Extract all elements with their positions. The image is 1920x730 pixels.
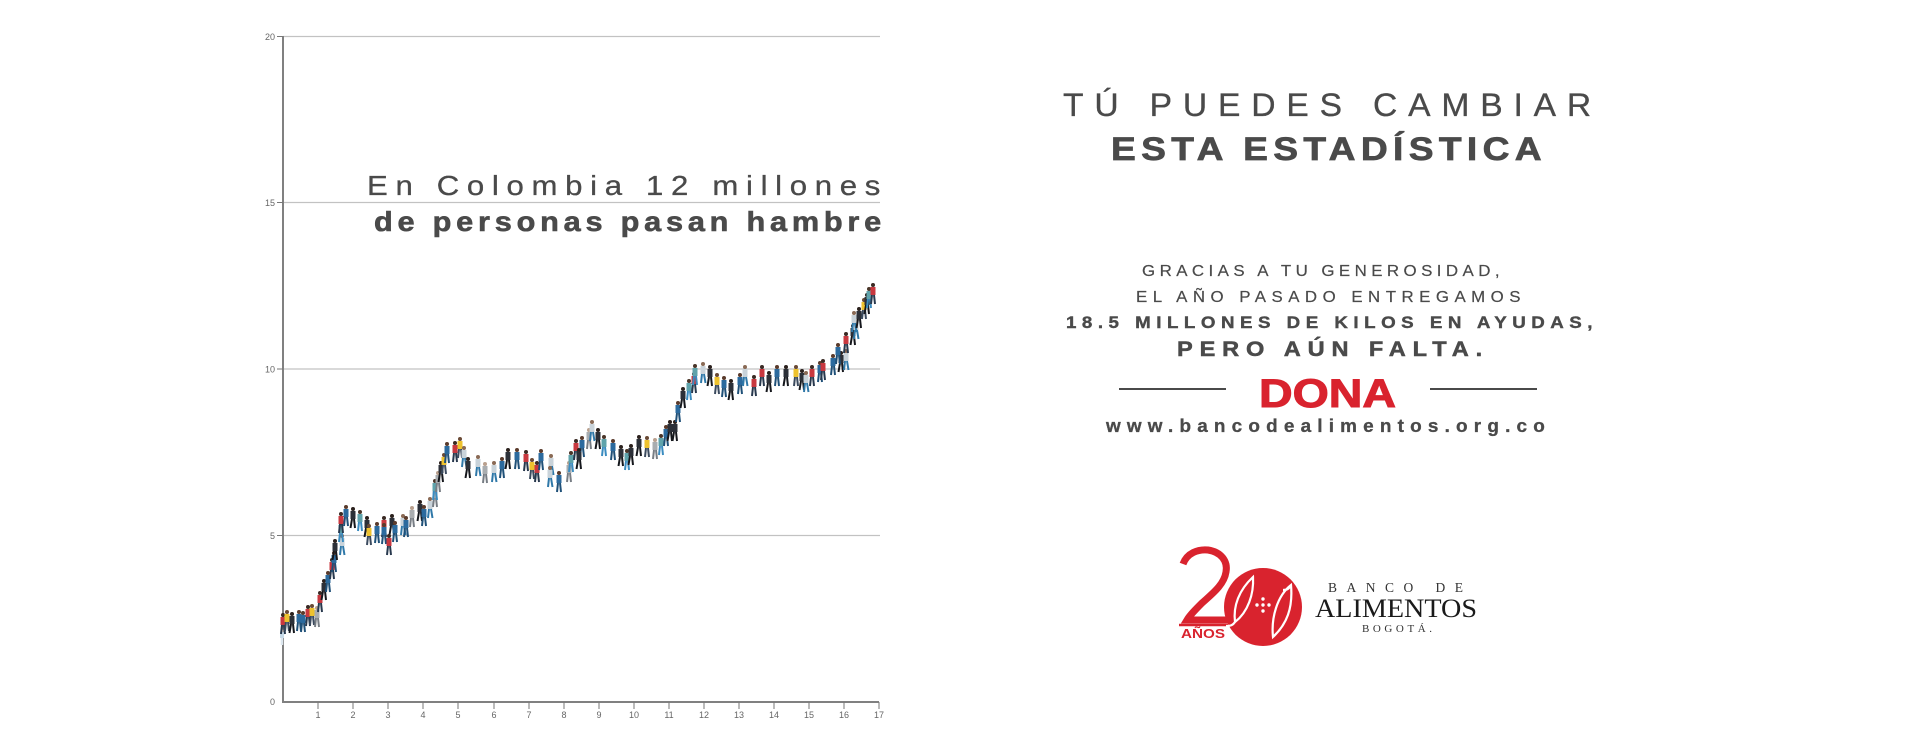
anos label: AÑOS: [1181, 626, 1225, 641]
x axis labels: 14: [769, 710, 779, 720]
message line 1: GRACIAS A TU GENEROSIDAD,: [1142, 263, 1504, 280]
x axis labels: 8: [561, 710, 567, 720]
red circle: [1224, 568, 1302, 646]
x axis labels: 16: [839, 710, 849, 720]
x axis labels: 13: [734, 710, 744, 720]
x axis labels: 2: [350, 710, 356, 720]
chart: people line graph: [265, 32, 884, 720]
alimentos: ALIMENTOS: [1315, 594, 1477, 623]
axis ticks: [277, 36, 879, 709]
bogota: BOGOTÁ.: [1362, 623, 1432, 635]
x axis labels: 3: [385, 710, 391, 720]
x axis labels: [315, 710, 884, 720]
headline line 2: de personas pasan hambre: [374, 206, 886, 237]
x axis labels: 15: [804, 710, 814, 720]
grid lines: [283, 36, 880, 536]
logo: Banco de Alimentos Bogotá: [1179, 550, 1477, 646]
fish left: [1226, 577, 1253, 626]
x axis labels: 9: [596, 710, 602, 720]
heading: call to action: [1063, 87, 1602, 167]
x axis labels: 1: [315, 710, 321, 720]
x axis labels: 7: [526, 710, 532, 720]
chart headline: [367, 170, 888, 237]
logo mark: 20 años: [1179, 550, 1302, 646]
y axis labels: 0: [270, 697, 275, 707]
y axis labels: 15: [265, 198, 275, 208]
x axis labels: 11: [664, 710, 674, 720]
heading line 1: TÚ PUEDES CAMBIAR: [1063, 87, 1602, 123]
y axis labels: 10: [265, 364, 275, 374]
fish right: [1273, 585, 1291, 637]
x axis labels: 6: [491, 710, 497, 720]
divider line right: [1430, 388, 1537, 390]
center dots: [1257, 599, 1269, 611]
message line 2: EL AÑO PASADO ENTREGAMOS: [1136, 286, 1526, 306]
x axis labels: 17: [874, 710, 884, 720]
message line 4: PERO AÚN FALTA.: [1177, 337, 1489, 361]
website url: www.bancodealimentos.org.co: [1105, 416, 1551, 436]
crowd of people forming the rising line: [280, 283, 875, 645]
message line 3: 18.5 MILLONES DE KILOS EN AYUDAS,: [1066, 313, 1598, 332]
heading line 2: ESTA ESTADÍSTICA: [1111, 131, 1547, 167]
x axis labels: 12: [699, 710, 709, 720]
y axis labels: 5: [270, 531, 275, 541]
axes: [283, 36, 879, 702]
y axis labels: [265, 32, 275, 707]
headline line 1: En Colombia 12 millones: [367, 170, 888, 201]
numeral 2: [1183, 550, 1228, 620]
y axis labels: 20: [265, 32, 275, 42]
x axis labels: 4: [420, 710, 426, 720]
dona word: DONA: [1259, 372, 1396, 416]
text block: thanks message: [1066, 263, 1598, 361]
banco de: BANCO DE: [1328, 580, 1463, 595]
divider line left: [1119, 388, 1226, 390]
underline swoosh: [1179, 624, 1228, 626]
logo wordmark: [1315, 580, 1477, 635]
x axis labels: 10: [629, 710, 639, 720]
x axis labels: 5: [455, 710, 461, 720]
